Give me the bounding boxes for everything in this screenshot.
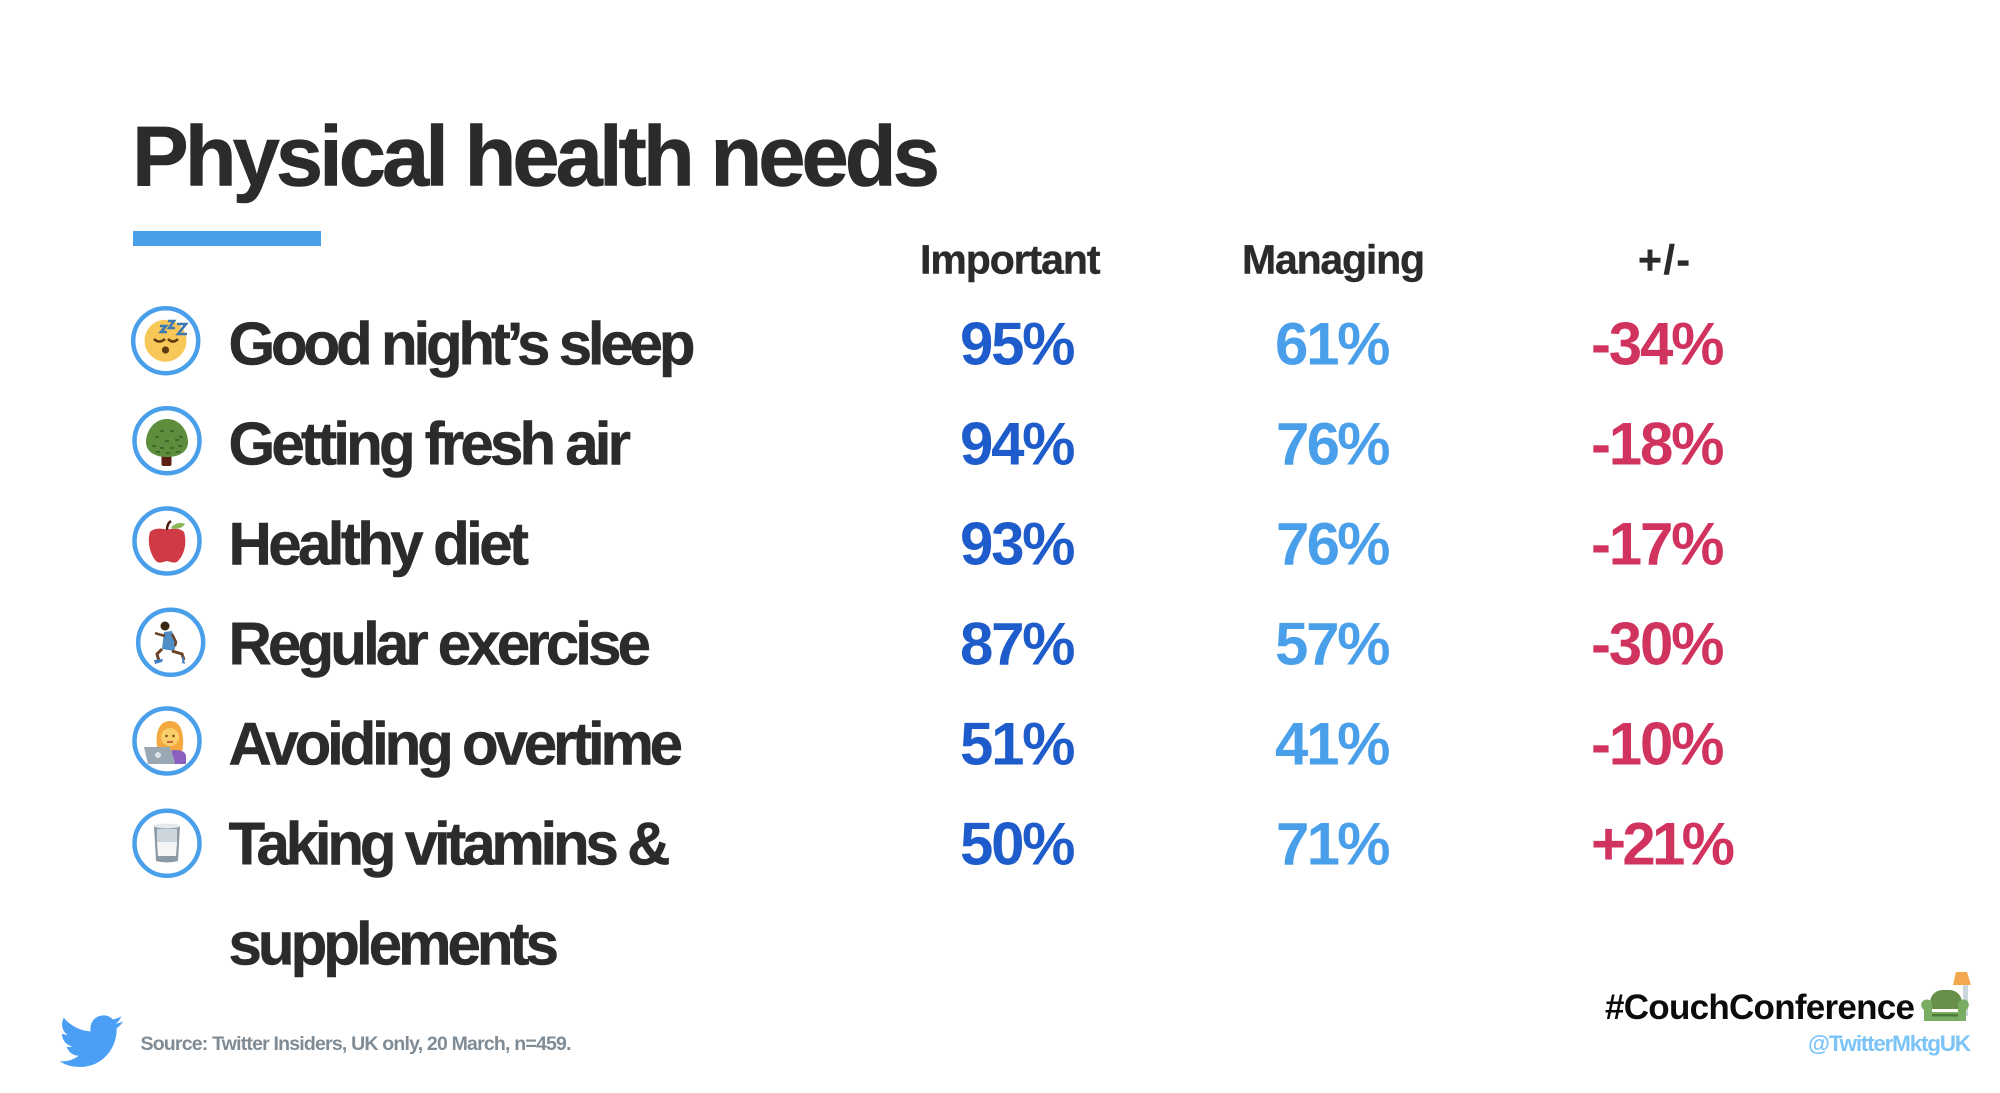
icon: woman with laptop [134, 708, 200, 774]
label: Regular exercise [228, 610, 651, 678]
label [228, 810, 670, 978]
column headers: Important [920, 236, 1101, 282]
row: healthy diet [134, 508, 1724, 578]
title: Physical health needs [132, 110, 940, 204]
label: Healthy diet [228, 510, 529, 578]
icon: apple [134, 508, 200, 574]
hashtag: #CouchConference [1605, 988, 1915, 1027]
row: regular exercise [138, 610, 1725, 678]
important value: 51% [960, 710, 1076, 778]
difference value: -30% [1591, 610, 1724, 678]
managing value: 61% [1275, 310, 1390, 378]
label: Avoiding overtime [228, 710, 683, 778]
label: Getting fresh air [228, 410, 631, 478]
icon: twitter bird [60, 1015, 123, 1067]
row: taking vitamins and supplements [134, 810, 1735, 978]
social handle: @TwitterMktgUK [1808, 1031, 1972, 1056]
important value: 87% [960, 610, 1076, 678]
icon: sleeping face [133, 308, 198, 373]
difference value: +21% [1591, 810, 1735, 878]
title accent bar [133, 231, 321, 246]
important value: 93% [960, 510, 1076, 578]
difference value: -17% [1591, 510, 1724, 578]
icon: tree [134, 408, 200, 473]
label: supplements [228, 910, 559, 978]
important value: 94% [960, 410, 1076, 478]
important value: 50% [960, 810, 1076, 878]
column headers: +/- [1638, 236, 1690, 282]
column headers: Managing [1242, 236, 1425, 282]
difference value: -10% [1591, 710, 1724, 778]
managing value: 71% [1276, 810, 1390, 878]
icon: glass of milk [134, 811, 200, 876]
managing value: 76% [1276, 410, 1390, 478]
difference value: -34% [1591, 310, 1724, 378]
managing value: 57% [1275, 610, 1390, 678]
important value: 95% [960, 310, 1076, 378]
source note: Source: Twitter Insiders, UK only, 20 March, n=459. [140, 1033, 572, 1055]
label: Good night’s sleep [228, 310, 696, 378]
managing value: 76% [1276, 510, 1390, 578]
difference value: -18% [1591, 410, 1724, 478]
managing value: 41% [1275, 710, 1390, 778]
icon: runner [138, 610, 203, 675]
row: good night's sleep [133, 308, 1725, 378]
icon: couch with lamp [1921, 972, 1971, 1021]
row: getting fresh air [134, 408, 1724, 478]
row: avoiding overtime [134, 708, 1724, 778]
column headers [920, 236, 1690, 282]
label: Taking vitamins & [228, 810, 670, 878]
